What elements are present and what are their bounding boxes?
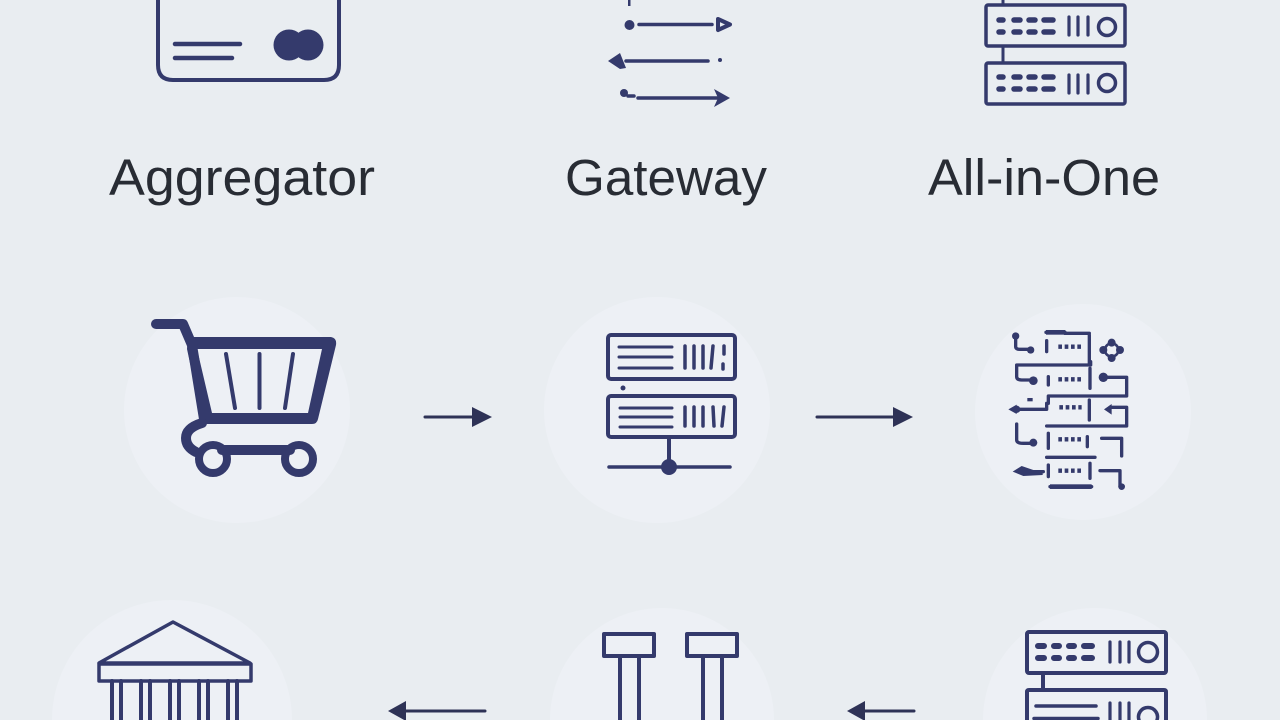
icon: circuit network (1008, 330, 1127, 490)
arrow: pillars to bank (388, 701, 485, 720)
label: All-in-One: All-in-One (928, 149, 1160, 206)
icon: stacked servers (986, 0, 1125, 104)
icon: networked server (608, 335, 735, 475)
label: Gateway: Gateway (565, 149, 767, 206)
icon: shopping cart (156, 324, 336, 473)
arrow: cart to server (425, 407, 492, 427)
arrow: server to network (817, 407, 913, 427)
label: Aggregator: Aggregator (109, 149, 375, 206)
icon: server stack bottom (1027, 632, 1166, 720)
icon: payment card (158, 0, 339, 80)
icon: gateway arrows (608, 0, 730, 107)
icon: bank building (99, 622, 251, 720)
arrow: server to pillars (847, 701, 914, 720)
icon: pillars (604, 634, 737, 720)
